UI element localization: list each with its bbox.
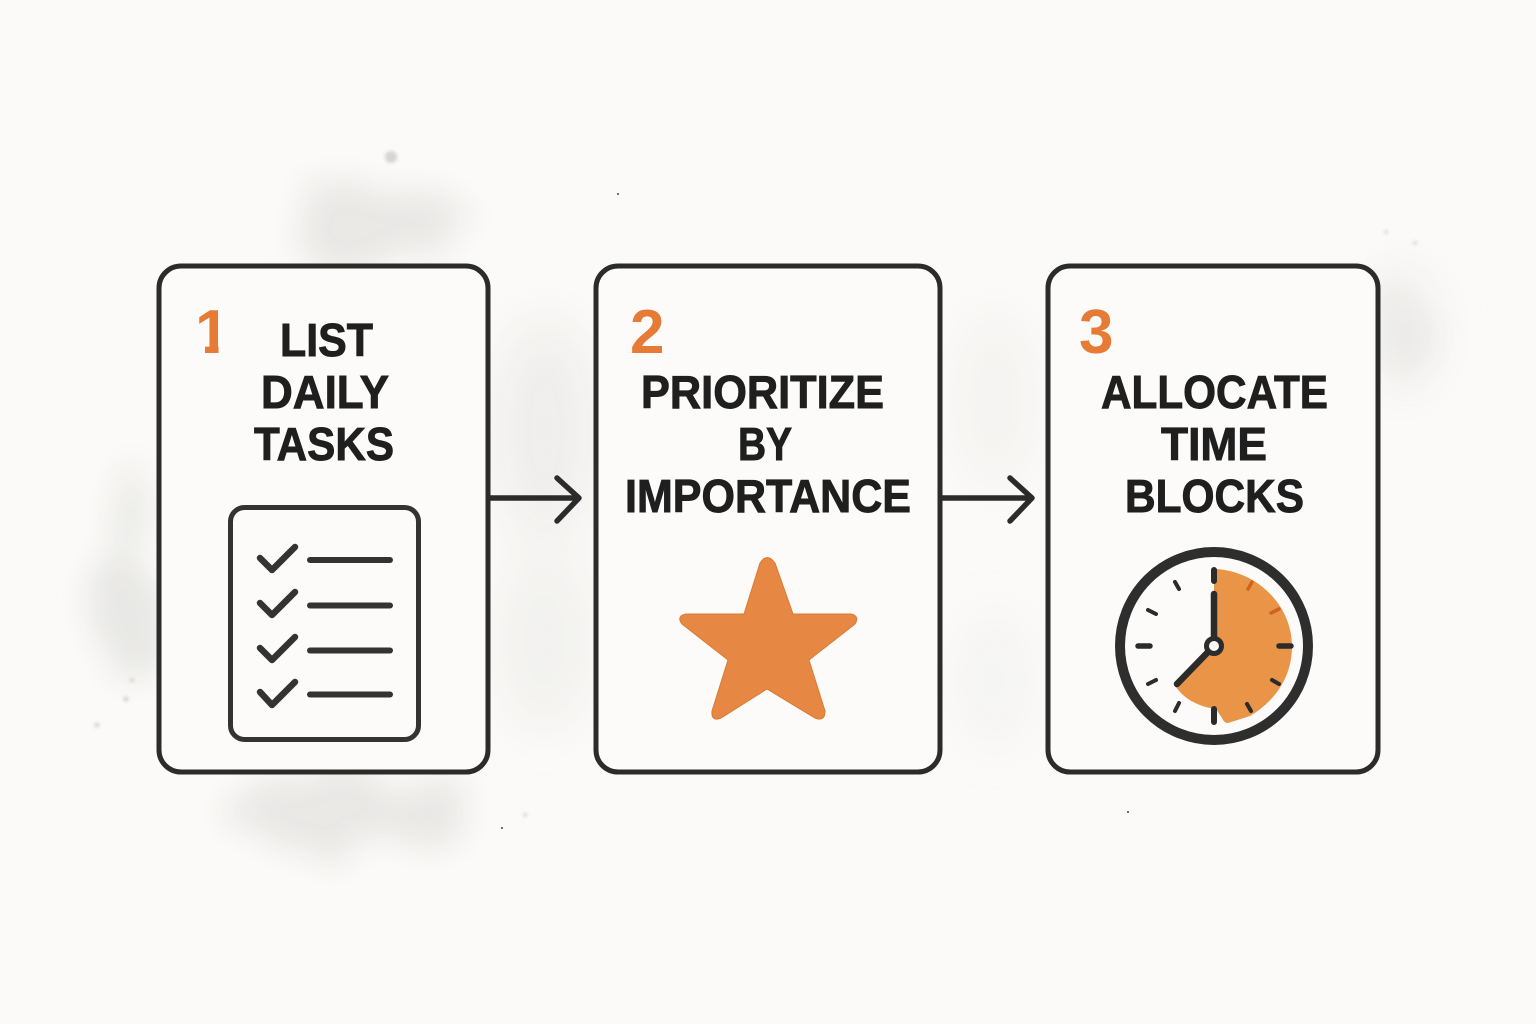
card 1 heading: LIST [280,314,373,366]
card 2 outline [596,266,940,772]
icon: checklist [230,508,418,740]
card 2 heading [625,366,911,522]
card 1 outline [159,266,488,772]
card 2 heading: BY [738,418,792,470]
clock ring [1120,552,1308,740]
step number 3: 3 [1079,298,1113,367]
card 3: allocate time blocks [1048,266,1378,772]
card 3 heading: ALLOCATE [1101,366,1328,418]
clock wedge [1176,569,1292,723]
card 1 heading: DAILY [261,366,389,418]
clock hands [1177,594,1214,684]
arrow: step 1 to step 2 [490,478,579,521]
watercolor smudges [91,151,1430,846]
card 2: prioritize by importance [596,266,940,772]
clock ticks [1138,570,1291,722]
card 3 heading [1101,366,1328,522]
step number 2: 2 [630,298,664,367]
card 2 heading: PRIORITIZE [641,366,884,418]
clock hub [1206,638,1222,654]
card 1 heading [254,314,394,470]
card 1 heading: TASKS [254,418,394,470]
step number 1: 1 [195,298,229,367]
icon: star [680,558,857,719]
card 2 heading: IMPORTANCE [625,470,911,522]
card 1: list daily tasks [159,266,488,772]
icon: clock [1120,552,1308,740]
card 3 heading: BLOCKS [1125,470,1304,522]
card 3 heading: TIME [1161,418,1267,470]
arrow: step 2 to step 3 [941,478,1032,521]
card 3 outline [1048,266,1378,772]
